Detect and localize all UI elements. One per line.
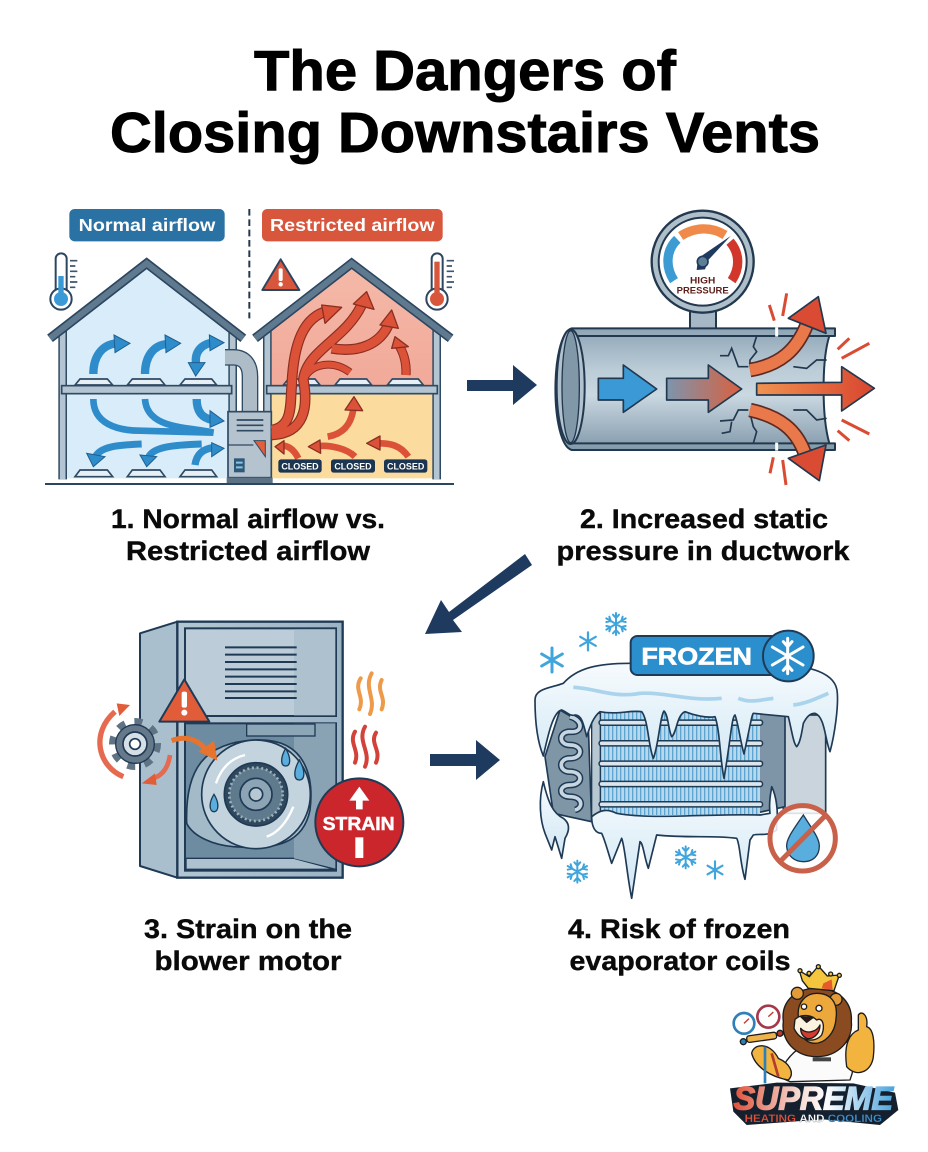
duct pipe — [555, 327, 835, 451]
strain badge: STRAIN — [323, 813, 395, 834]
arrow: step 1 to 2 — [467, 365, 537, 405]
frozen badge — [631, 631, 814, 681]
caption 3: 3. Strain on the — [144, 914, 352, 944]
warning icon — [262, 259, 299, 290]
coil unit — [545, 710, 826, 822]
icon: cold thermometer — [50, 253, 77, 310]
caption 2: 2. Increased static — [580, 504, 828, 534]
furnace and duct — [225, 357, 273, 484]
caption 3: blower motor — [154, 946, 342, 976]
restricted house — [255, 263, 451, 479]
left ice — [540, 782, 569, 858]
normal airflow label: Normal airflow — [79, 215, 216, 235]
spark marks — [769, 293, 869, 485]
ice cap with icicles — [535, 663, 838, 778]
icon: gear with rotation arrows — [100, 703, 170, 785]
furnace cabinet — [140, 622, 343, 878]
icon: no water sign — [768, 804, 837, 873]
normal airflow arrows — [87, 335, 224, 467]
caption 2: pressure in ductwork — [556, 536, 851, 566]
title — [110, 39, 820, 165]
burst arrows — [750, 297, 874, 481]
restricted airflow arrows — [272, 292, 408, 458]
brand wordmark: SUPREME — [734, 1080, 895, 1116]
ice highlight — [573, 687, 828, 705]
icons: snowflakes — [542, 613, 722, 883]
panel 1: normal vs restricted airflow — [45, 209, 454, 484]
lower ice with icicles — [592, 787, 777, 898]
panel 4: frozen evaporator coil — [535, 613, 838, 898]
ground line — [45, 481, 454, 487]
arrow: step 2 to 3 — [425, 554, 532, 634]
caption 2 — [556, 504, 851, 566]
closed vent tags: CLOSED — [387, 461, 425, 471]
normal airflow label — [69, 209, 225, 241]
icon: hot thermometer — [426, 253, 454, 310]
strain badge — [315, 778, 403, 866]
caption 3 — [144, 914, 352, 976]
caption 4 — [568, 914, 790, 976]
arrow: gear to blower — [172, 738, 217, 761]
center divider — [246, 209, 252, 318]
restricted airflow label: Restricted airflow — [270, 215, 435, 235]
icon: heat waves — [353, 673, 383, 767]
flow arrows inside duct — [598, 365, 742, 412]
panel 2: increased static pressure — [555, 211, 874, 485]
pressure gauge: HIGH — [690, 275, 715, 285]
pressure gauge: PRESSURE — [677, 285, 729, 295]
caption 4: evaporator coils — [570, 946, 790, 976]
warning icon — [159, 679, 209, 722]
closed vent tags: CLOSED — [334, 461, 372, 471]
normal house — [50, 263, 243, 479]
caption 1: Restricted airflow — [126, 536, 371, 566]
caption 4: 4. Risk of frozen — [568, 914, 790, 944]
title: The Dangers of — [254, 39, 677, 103]
brand wordmark: HEATING AND COOLING — [745, 1113, 882, 1125]
panel 3: blower motor strain — [100, 622, 403, 878]
lion mascot — [752, 965, 874, 1082]
pressure gauge — [652, 211, 754, 329]
caption 1: 1. Normal airflow vs. — [111, 504, 385, 534]
closed vent tags: CLOSED — [281, 461, 319, 471]
frozen badge: FROZEN — [641, 644, 752, 671]
title: Closing Downstairs Vents — [110, 101, 820, 165]
blower assembly — [187, 740, 311, 849]
closed vent tags — [278, 459, 427, 473]
caption 1 — [111, 504, 385, 566]
logo: supreme heating and cooling — [730, 965, 898, 1125]
arrow: step 3 to 4 — [430, 740, 500, 780]
icon: manifold gauges — [734, 1006, 783, 1083]
restricted airflow label — [262, 209, 443, 241]
